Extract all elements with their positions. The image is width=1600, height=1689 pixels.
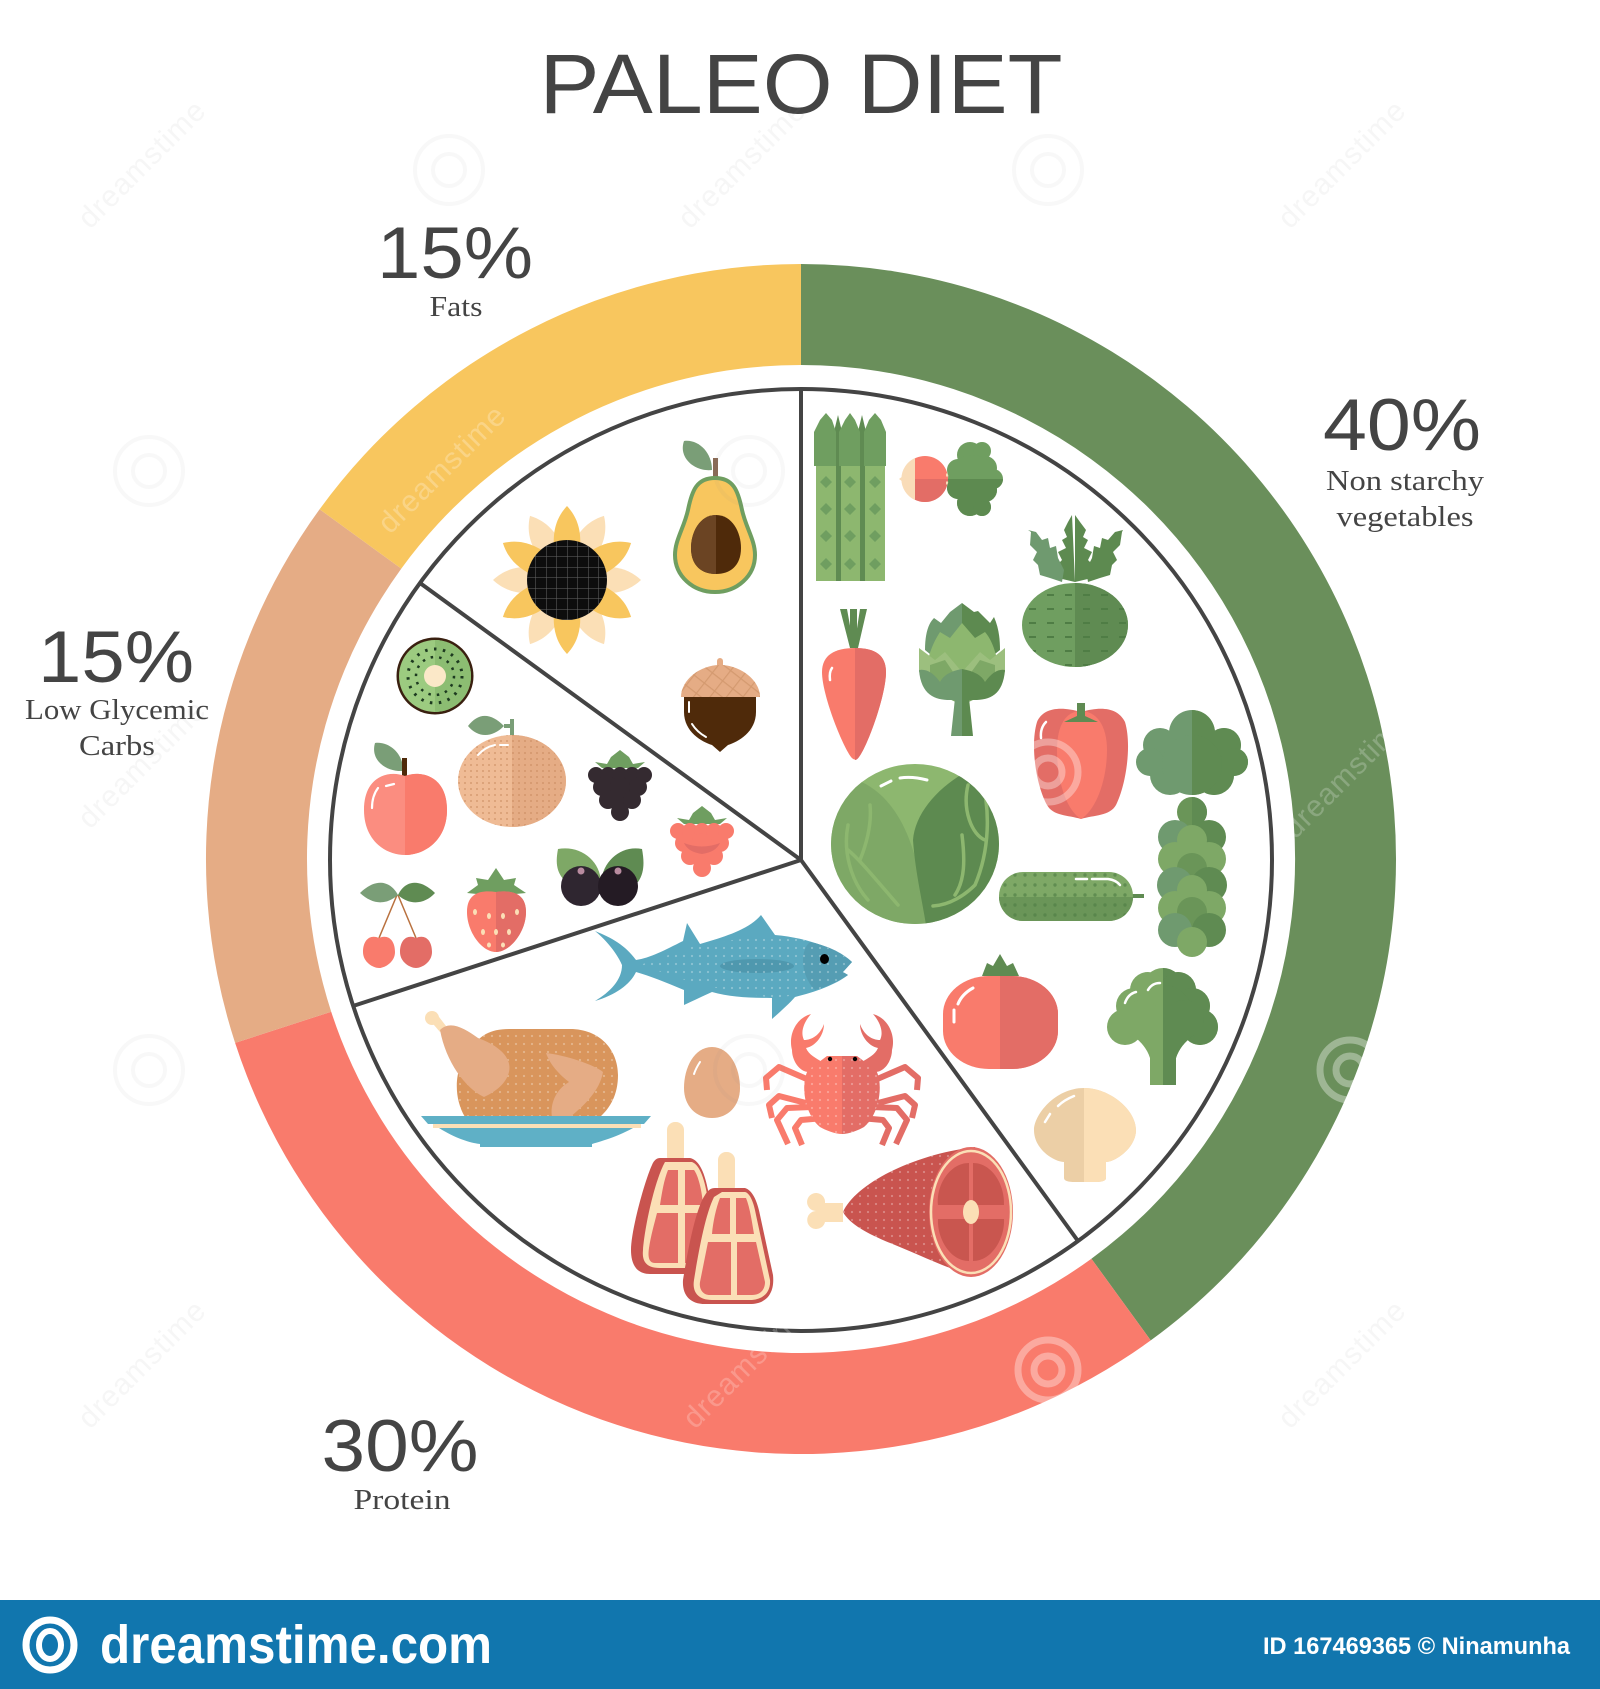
icon: carrot [822,609,886,760]
plate outline with dividers [330,389,1272,1331]
chop front [683,1152,773,1304]
watermark overlay: dreamstime [1277,704,1418,845]
watermark overlay: dreamstime [372,399,513,540]
watermark overlay: dreamstime [1272,1294,1413,1435]
icon: acorn [681,658,760,752]
icon: cherries [360,883,435,968]
label: fats 15%: 15% [377,213,533,294]
label: low glycemic carbs 15%: Low Glycemic [25,694,209,726]
image credit: ID 167469365 © Ninamunha [1263,1633,1571,1660]
icon: ham [807,1147,1013,1277]
label: non starchy vegetables 40%: 40% [1323,385,1481,466]
icon: strawberry [467,868,526,952]
icon: cabbage [825,764,1005,925]
watermark overlay: dreamstime [72,94,213,235]
icon: cucumber [999,872,1144,921]
logo wordmark: dreamstime.com [100,1615,492,1675]
chop back [631,1122,708,1274]
ring segment: fats 15% [320,264,801,569]
icon: brussels sprouts stalk [1136,710,1248,957]
label: fats 15%: Fats [430,291,482,323]
icon: asparagus [814,413,886,581]
label: protein 30%: 30% [322,1406,478,1487]
icon: apple [364,743,447,855]
icon: peach [458,716,566,827]
ring chart: macronutrient proportions [206,264,1396,1454]
icon: roast chicken on plate [421,1011,651,1147]
footer bar [0,1600,1600,1689]
watermark overlay: dreamstime [672,94,813,235]
label: protein 30% [322,1406,478,1516]
icon: broccoli [1107,968,1218,1085]
title: PALEO DIET [540,37,1062,131]
icon: crab [766,1014,918,1145]
label: low glycemic carbs 15%: Carbs [79,730,155,762]
icon: bell pepper [1034,703,1128,819]
icon: kiwi [396,638,474,714]
label: protein 30%: Protein [354,1484,451,1516]
ring segment: carbs 15% [206,509,401,1043]
ring segment: protein 30% [235,1012,1151,1454]
icon: mushroom [1034,1088,1136,1182]
label: fats 15% [377,213,533,323]
icon: blackberry [588,750,652,821]
icon: artichoke [919,603,1005,736]
icon: avocado [675,441,755,592]
icon: sunflower [493,506,641,654]
label: non starchy vegetables 40% [1323,385,1485,533]
label: non starchy vegetables 40%: vegetables [1336,501,1474,533]
label: non starchy vegetables 40%: Non starchy [1326,465,1485,497]
icon: lamb chops [631,1122,773,1304]
ring segment: vegetables 40% [801,264,1396,1340]
label: low glycemic carbs 15%: 15% [38,617,194,698]
watermark overlay: dreamstime [677,1294,818,1435]
watermark overlay: dreamstime [72,1294,213,1435]
icon: spiral logo [26,1620,74,1670]
label: low glycemic carbs 15% [25,617,209,762]
icon: raspberry [670,806,734,877]
icon: blueberries [557,848,643,906]
watermark overlay: dreamstime [72,694,213,835]
watermark overlay [72,94,1418,1435]
icon: tuna fish [595,915,852,1019]
icon: tomato [943,954,1058,1069]
watermark overlay: dreamstime [1272,94,1413,235]
icon: turnip with leaves [1022,515,1128,667]
icon: radish [899,442,1003,516]
icon: egg [684,1047,740,1118]
